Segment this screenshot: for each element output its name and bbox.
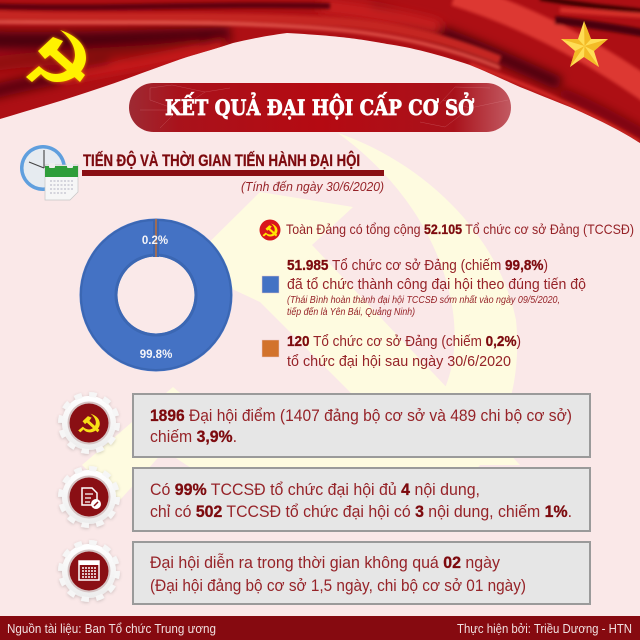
- title banner: [129, 83, 511, 132]
- donut chart: 0.2%: [142, 235, 168, 247]
- header ribbon: [0, 0, 640, 150]
- gear icon 2: [60, 468, 118, 526]
- section heading: [82, 151, 384, 194]
- legend: on schedule: 51.985 Tổ chức cơ sở Đảng (chiếm 99,8%): [287, 257, 548, 274]
- footer: [0, 616, 640, 640]
- title text: KẾT QUẢ ĐẠI HỘI CẤP CƠ SỞ: [165, 92, 475, 120]
- donut chart: 99.8%: [140, 349, 172, 361]
- footer: Nguồn tài liệu: Ban Tổ chức Trung ương: [7, 621, 216, 636]
- gear icon 3: [60, 542, 118, 600]
- legend: on schedule: đã tổ chức thành công đại hội theo đúng tiến độ: [287, 276, 586, 293]
- donut chart: [81, 219, 231, 370]
- info box 1: chiếm 3,9%.: [150, 427, 237, 446]
- legend: late: [262, 333, 521, 370]
- gear icon 1: [60, 394, 118, 452]
- info box 3: Đại hội diễn ra trong thời gian không quá 02 ngày: [150, 553, 500, 572]
- legend: on schedule: [262, 257, 586, 318]
- legend: total: [260, 220, 634, 240]
- date note: (Tính đến ngày 30/6/2020): [241, 179, 384, 194]
- info box 2: chỉ có 502 TCCSĐ tổ chức đại hội có 3 nội dung, chiếm 1%.: [150, 502, 572, 521]
- legend: late: tổ chức đại hội sau ngày 30/6/2020: [287, 353, 511, 370]
- info box 1: [133, 394, 590, 457]
- legend: on schedule: tiếp đến là Yên Bái, Quảng Ninh): [287, 306, 415, 318]
- info box 3: [133, 542, 590, 604]
- icon: gold star: [561, 21, 608, 67]
- info box 2: [133, 468, 590, 531]
- icon: clock and calendar: [20, 145, 78, 200]
- icon: hammer and sickle logo: [26, 30, 86, 82]
- legend: on schedule: (Thái Bình hoàn thành đại hội TCCSĐ sớm nhất vào ngày 09/5/2020,: [287, 294, 560, 306]
- info box 3: (Đại hội đảng bộ cơ sở 1,5 ngày, chi bộ cơ sở 01 ngày): [150, 576, 526, 595]
- info box 2: Có 99% TCCSĐ tổ chức đại hội đủ 4 nội dung,: [150, 480, 480, 499]
- info box 1: 1896 Đại hội điểm (1407 đảng bộ cơ sở và 489 chi bộ cơ sở): [150, 406, 572, 425]
- section heading: TIẾN ĐỘ VÀ THỜI GIAN TIẾN HÀNH ĐẠI HỘI: [83, 151, 360, 170]
- watermark: hammer and sickle: [82, 133, 520, 516]
- legend: late: 120 Tổ chức cơ sở Đảng (chiếm 0,2%): [287, 333, 521, 350]
